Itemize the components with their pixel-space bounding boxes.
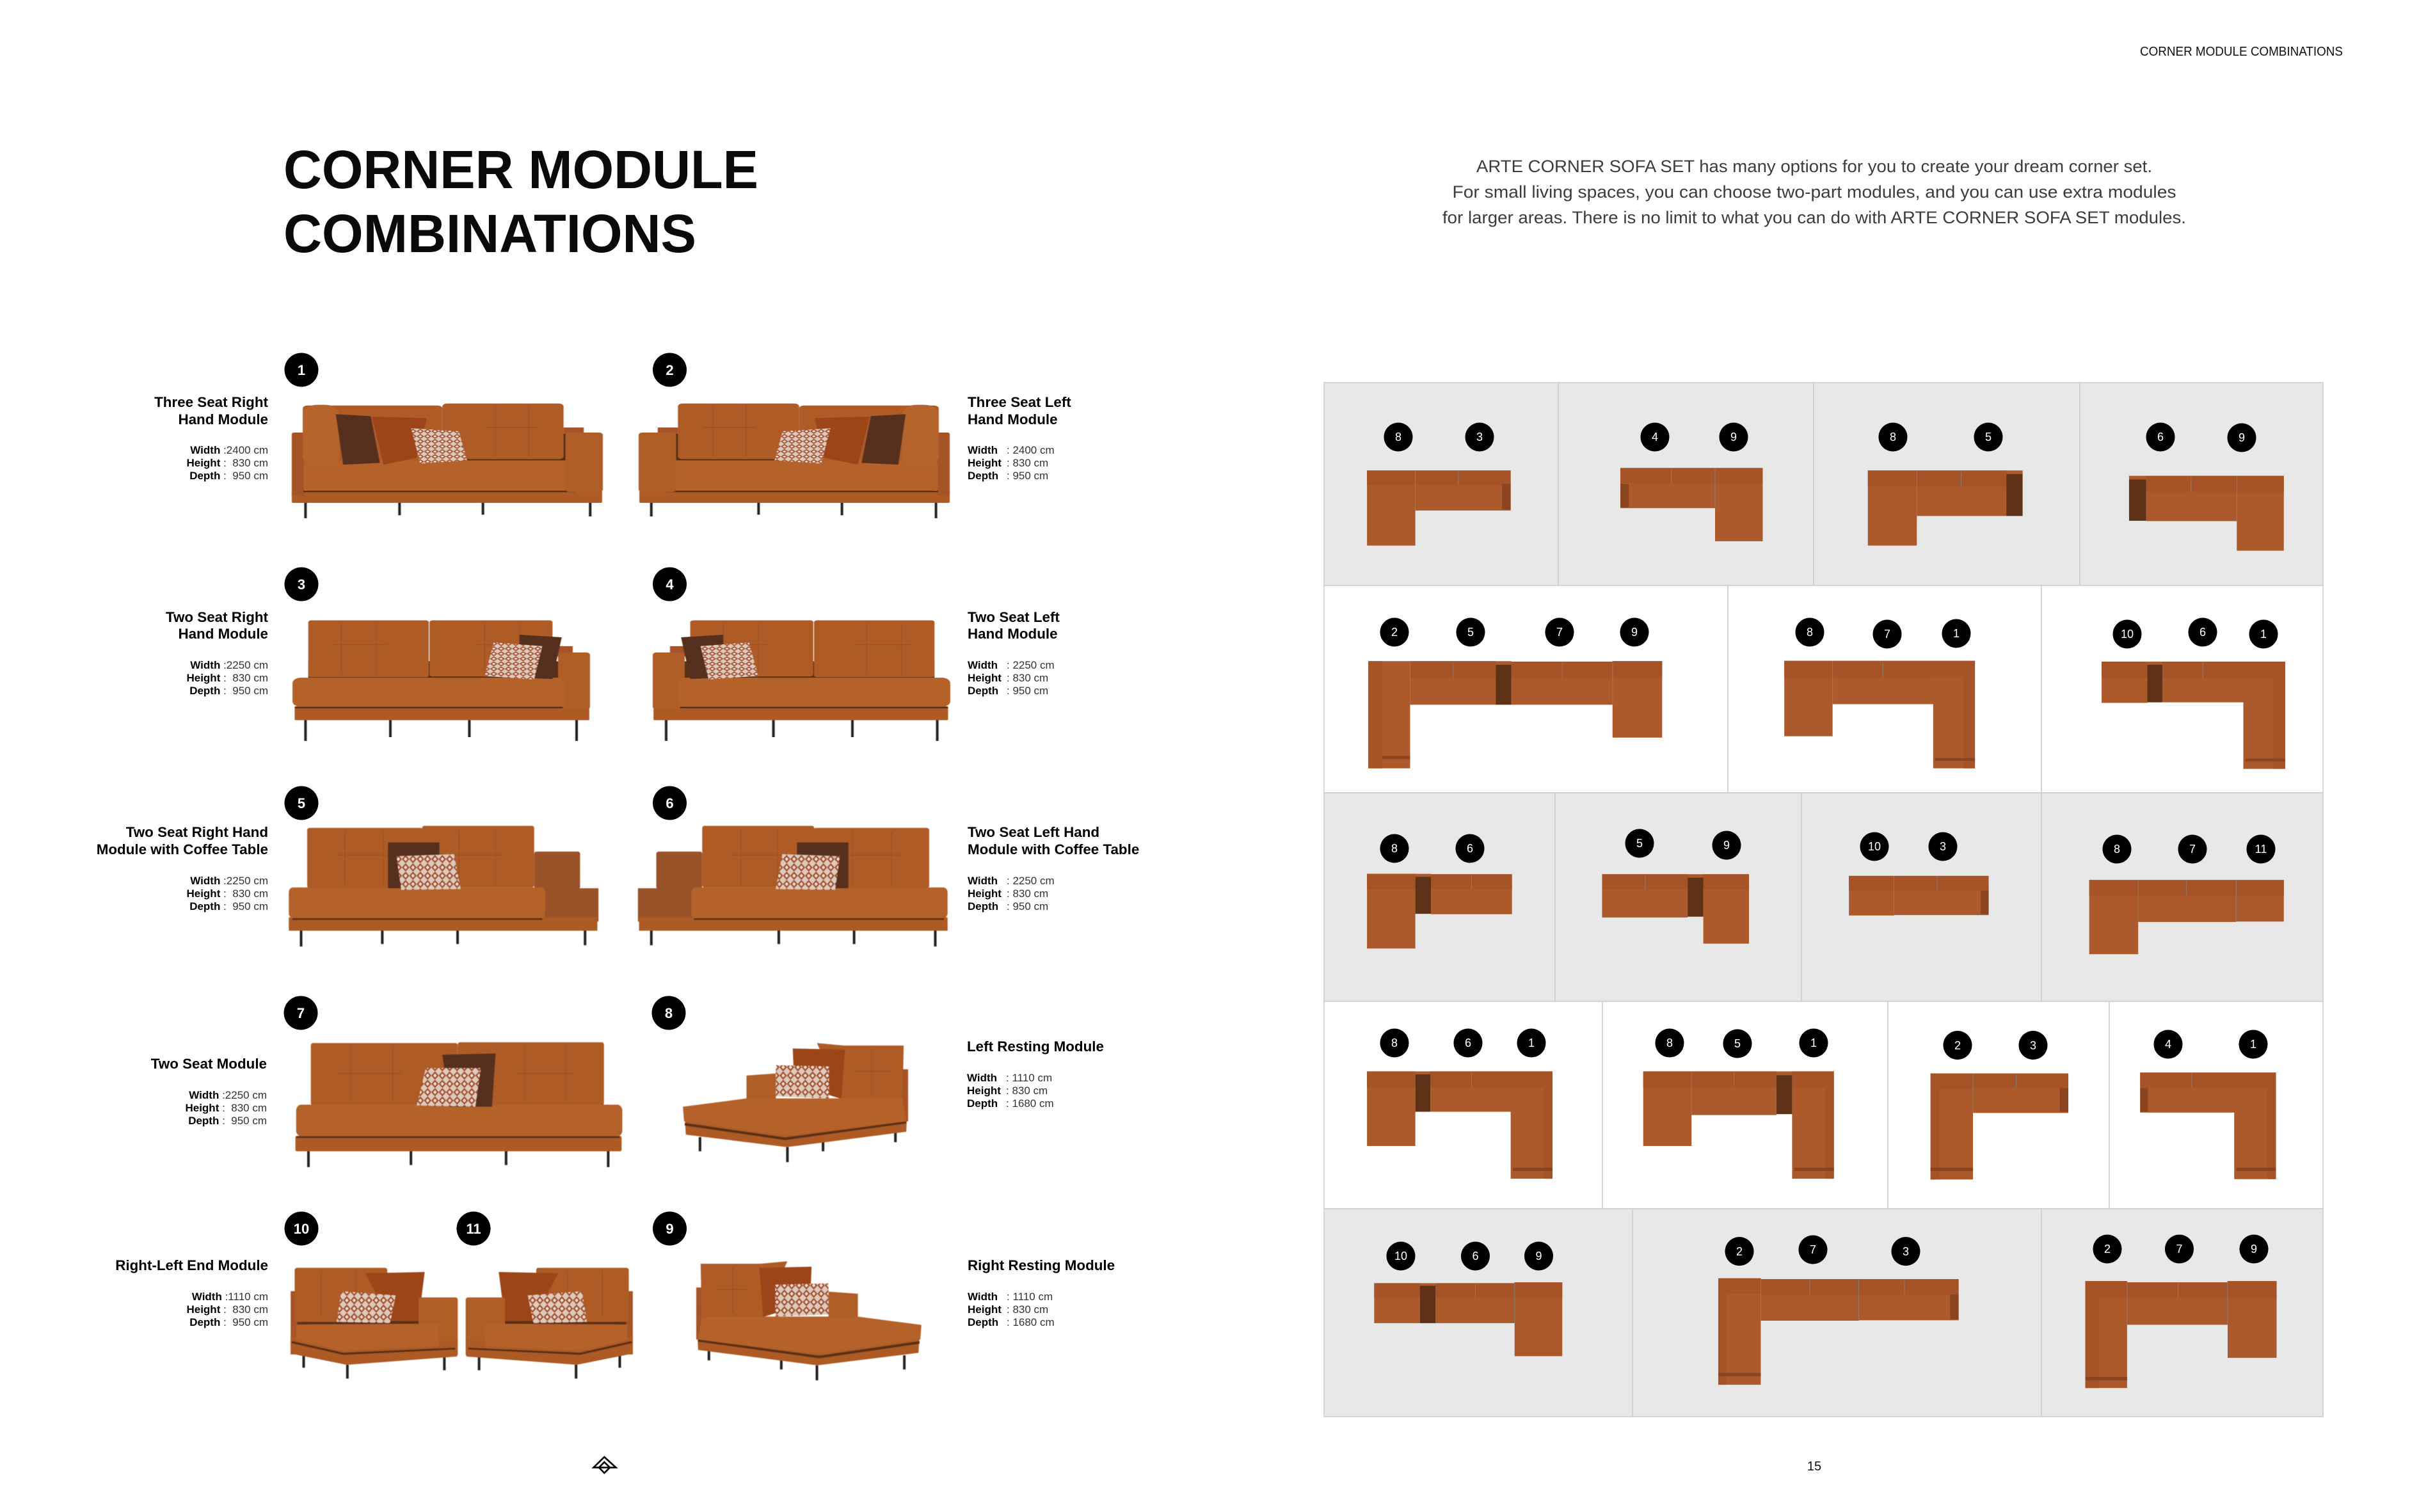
module 10 and 11: right-left end module: Right-Left End Module — [115, 1257, 268, 1273]
combination 8 + 5 + 1: 1 — [1810, 1037, 1817, 1049]
running header: CORNER MODULE COMBINATIONS — [2140, 45, 2343, 59]
module 2: three seat left hand: Depth — [968, 470, 998, 482]
module 5: two seat right hand with coffee table: Two Seat Right Hand — [126, 824, 268, 840]
module 10 and 11: right-left end module: 11 — [466, 1221, 481, 1237]
module 9: right resting module: Width — [968, 1291, 998, 1303]
combination 8 + 5: 5 — [1985, 431, 1992, 443]
combination 10 + 6 + 9: 9 — [1535, 1250, 1542, 1262]
intro paragraph: For small living spaces, you can choose two-part modules, and you can use extra modules — [1453, 182, 2176, 202]
module 9: right resting module: : 1680 cm — [1007, 1316, 1055, 1328]
module 1: three seat right hand: Depth : 950 cm — [189, 470, 268, 482]
combination 8 + 7 + 11: 7 — [2189, 843, 2196, 855]
footer logo icon — [594, 1457, 616, 1473]
module 6: two seat left hand with coffee table — [638, 786, 1139, 946]
combination 2 + 3: 3 — [2030, 1039, 2036, 1052]
combination 10 + 6 + 1: 10 — [2121, 628, 2134, 641]
combination 10 + 6 + 9 — [1324, 1209, 1633, 1417]
combination 2 + 5 + 7 + 9: 5 — [1467, 626, 1474, 639]
combination 8 + 5: 8 — [1890, 431, 1896, 443]
combination 2 + 5 + 7 + 9: 7 — [1556, 626, 1563, 639]
module 6: two seat left hand with coffee table: Two Seat Left Hand — [968, 824, 1099, 840]
title — [283, 139, 758, 264]
module 3: two seat right hand: 3 — [298, 577, 305, 593]
module 7: two seat module: Width :2250 cm — [189, 1089, 267, 1101]
module 4: two seat left hand: Width — [968, 659, 998, 671]
module 10 and 11: right-left end module: 10 — [294, 1221, 309, 1237]
module 2: three seat left hand: : 830 cm — [1007, 457, 1048, 469]
combination 8 + 6: 8 — [1391, 842, 1398, 855]
combination 8 + 5 + 1: 5 — [1734, 1037, 1741, 1050]
intro paragraph — [1442, 157, 2186, 227]
combination 5 + 9: 5 — [1636, 837, 1643, 850]
module 4: two seat left hand: : 950 cm — [1007, 685, 1048, 697]
combination 10 + 6 + 1: 6 — [2199, 626, 2206, 639]
module 3: two seat right hand: Height : 830 cm — [186, 672, 268, 684]
module 4: two seat left hand: Depth — [968, 685, 998, 697]
module 1: three seat right hand: Width :2400 cm — [190, 444, 268, 456]
combination 8 + 6: 6 — [1467, 842, 1473, 855]
combination 2 + 5 + 7 + 9 — [1324, 585, 1728, 793]
combination 8 + 7 + 1: 7 — [1884, 628, 1890, 641]
module 3: two seat right hand: Two Seat Right — [166, 609, 269, 625]
module 5: two seat right hand with coffee table — [97, 786, 598, 946]
combination 4 + 9: 4 — [1652, 431, 1658, 443]
module 5: two seat right hand with coffee table: Module with Coffee Table — [97, 841, 268, 857]
combination 2 + 3 — [1888, 1001, 2109, 1209]
combination 10 + 6 + 9: 10 — [1394, 1250, 1407, 1262]
module 9: right resting module: Right Resting Module — [968, 1257, 1115, 1273]
module 10 and 11: right-left end module: Width :1110 cm — [192, 1291, 268, 1303]
module 4: two seat left hand: 4 — [666, 577, 674, 593]
module 1: three seat right hand: 1 — [298, 362, 305, 378]
module 7: two seat module — [151, 996, 622, 1167]
combination 2 + 7 + 3: 7 — [1810, 1243, 1816, 1256]
combination 10 + 6 + 1 — [2041, 585, 2323, 793]
module 1: three seat right hand — [154, 353, 603, 518]
module 4: two seat left hand: : 2250 cm — [1007, 659, 1055, 671]
combination 2 + 7 + 3: 2 — [1736, 1245, 1743, 1258]
combination 2 + 7 + 9: 9 — [2251, 1243, 2257, 1255]
module 5: two seat right hand with coffee table: 5 — [298, 795, 305, 811]
module 1: three seat right hand: Three Seat Right — [154, 394, 269, 410]
module 7: two seat module: Height : 830 cm — [185, 1102, 267, 1114]
module 6: two seat left hand with coffee table: Height — [968, 887, 1002, 900]
combination 5 + 9: 9 — [1723, 839, 1730, 852]
module 2: three seat left hand: Three Seat Left — [968, 394, 1071, 410]
module 6: two seat left hand with coffee table: Depth — [968, 900, 998, 912]
module 8: left resting module: : 1680 cm — [1006, 1097, 1054, 1110]
module 4: two seat left hand: Two Seat Left — [968, 609, 1060, 625]
module 8: left resting module: Height — [967, 1085, 1001, 1097]
module 2: three seat left hand: Width — [968, 444, 998, 456]
module 4: two seat left hand: Height — [968, 672, 1002, 684]
combination 2 + 7 + 9 — [2041, 1209, 2323, 1417]
module 1: three seat right hand: Height : 830 cm — [186, 457, 268, 469]
module 2: three seat left hand: : 2400 cm — [1007, 444, 1055, 456]
module 9: right resting module: Depth — [968, 1316, 998, 1328]
combination 10 + 3: 3 — [1940, 840, 1946, 853]
combination 8 + 6 + 1 — [1324, 1001, 1602, 1209]
intro paragraph: ARTE CORNER SOFA SET has many options for you to create your dream corner set. — [1476, 157, 2152, 176]
combination 8 + 7 + 1: 1 — [1953, 627, 1960, 640]
module 8: left resting module: : 1110 cm — [1006, 1072, 1052, 1084]
combination 8 + 6 — [1324, 793, 1555, 1001]
title: CORNER MODULE — [283, 139, 758, 200]
module 6: two seat left hand with coffee table: : 830 cm — [1007, 887, 1048, 900]
module 3: two seat right hand: Width :2250 cm — [190, 659, 268, 671]
module 1: three seat right hand: Hand Module — [178, 411, 268, 427]
module 4: two seat left hand: Hand Module — [968, 626, 1058, 642]
combination 10 + 6 + 1: 1 — [2260, 628, 2267, 641]
combination 8 + 7 + 1: 8 — [1807, 626, 1813, 639]
module 8: left resting module — [651, 996, 1104, 1162]
combination 10 + 6 + 9: 6 — [1472, 1250, 1479, 1262]
module 8: left resting module: Depth — [967, 1097, 998, 1110]
combination 8 + 6 + 1: 1 — [1528, 1037, 1535, 1049]
module 9: right resting module: : 1110 cm — [1007, 1291, 1053, 1303]
combination 8 + 6 + 1: 6 — [1465, 1037, 1471, 1049]
module 9: right resting module — [653, 1212, 1115, 1380]
combination 8 + 7 + 11 — [2041, 793, 2323, 1001]
combination 8 + 3: 8 — [1395, 431, 1401, 443]
combination 8 + 5 + 1 — [1602, 1001, 1888, 1209]
module 6: two seat left hand with coffee table: : 950 cm — [1007, 900, 1048, 912]
module 6: two seat left hand with coffee table: : 2250 cm — [1007, 875, 1055, 887]
page number: 15 — [1807, 1460, 1821, 1474]
module 8: left resting module: Width — [967, 1072, 997, 1084]
module 6: two seat left hand with coffee table: Width — [968, 875, 998, 887]
combination 2 + 5 + 7 + 9: 9 — [1631, 626, 1638, 639]
module 10 and 11: right-left end module: Height : 830 cm — [186, 1303, 268, 1316]
combination 2 + 7 + 3 — [1633, 1209, 2041, 1417]
combination 8 + 3 — [1324, 383, 1558, 585]
combination 8 + 7 + 1 — [1728, 585, 2041, 793]
module 4: two seat left hand — [653, 567, 1060, 741]
module 8: left resting module: Left Resting Module — [967, 1039, 1104, 1054]
combination 2 + 7 + 3: 3 — [1903, 1245, 1909, 1258]
combination 6 + 9: 6 — [2157, 431, 2164, 443]
combination 4 + 1: 1 — [2250, 1038, 2256, 1051]
combination 6 + 9: 9 — [2239, 431, 2245, 444]
combination 10 + 3: 10 — [1868, 840, 1881, 853]
module 9: right resting module: Height — [968, 1303, 1002, 1316]
module 3: two seat right hand — [166, 567, 590, 741]
module 2: three seat left hand: Height — [968, 457, 1002, 469]
module 9: right resting module: : 830 cm — [1007, 1303, 1048, 1316]
combination 4 + 9 — [1558, 383, 1814, 585]
combination 8 + 7 + 11: 8 — [2114, 843, 2120, 855]
combination 2 + 3: 2 — [1954, 1039, 1961, 1052]
combination 8 + 7 + 11: 11 — [2255, 843, 2267, 855]
module 7: two seat module: Depth : 950 cm — [188, 1115, 267, 1127]
module 5: two seat right hand with coffee table: Depth : 950 cm — [189, 900, 268, 912]
module 3: two seat right hand: Depth : 950 cm — [189, 685, 268, 697]
combination 2 + 7 + 9: 2 — [2104, 1243, 2111, 1255]
module 2: three seat left hand — [639, 353, 1071, 518]
module 2: three seat left hand: Hand Module — [968, 411, 1058, 427]
module 10 and 11: right-left end module: Depth : 950 cm — [189, 1316, 268, 1328]
module 9: right resting module: 9 — [666, 1221, 674, 1237]
module 8: left resting module: : 830 cm — [1006, 1085, 1048, 1097]
combination 8 + 5 + 1: 8 — [1666, 1037, 1673, 1049]
module 8: left resting module: 8 — [665, 1005, 673, 1021]
module 3: two seat right hand: Hand Module — [178, 626, 268, 642]
combination 10 + 3 — [1801, 793, 2041, 1001]
combination 4 + 9: 9 — [1730, 431, 1737, 443]
combination 2 + 5 + 7 + 9: 2 — [1391, 626, 1398, 639]
module 6: two seat left hand with coffee table: 6 — [666, 795, 674, 811]
intro paragraph: for larger areas. There is no limit to what you can do with ARTE CORNER SOFA SET modules. — [1442, 208, 2186, 227]
module 5: two seat right hand with coffee table: Width :2250 cm — [190, 875, 268, 887]
combination 8 + 5 — [1814, 383, 2080, 585]
module 2: three seat left hand: : 950 cm — [1007, 470, 1048, 482]
combination 8 + 3: 3 — [1476, 431, 1483, 443]
combination 2 + 7 + 9: 7 — [2176, 1243, 2183, 1255]
combination 4 + 1 — [2109, 1001, 2323, 1209]
module 4: two seat left hand: : 830 cm — [1007, 672, 1048, 684]
combination 6 + 9 — [2080, 383, 2323, 585]
title: COMBINATIONS — [283, 203, 696, 264]
combination 5 + 9 — [1555, 793, 1801, 1001]
combination 8 + 6 + 1: 8 — [1391, 1037, 1398, 1049]
module 6: two seat left hand with coffee table: Module with Coffee Table — [968, 841, 1139, 857]
module 7: two seat module: Two Seat Module — [151, 1056, 267, 1072]
module 7: two seat module: 7 — [297, 1005, 305, 1021]
module 10 and 11: right-left end module — [115, 1212, 633, 1378]
module 5: two seat right hand with coffee table: Height : 830 cm — [186, 887, 268, 900]
module 2: three seat left hand: 2 — [666, 362, 674, 378]
combination 4 + 1: 4 — [2165, 1038, 2171, 1051]
